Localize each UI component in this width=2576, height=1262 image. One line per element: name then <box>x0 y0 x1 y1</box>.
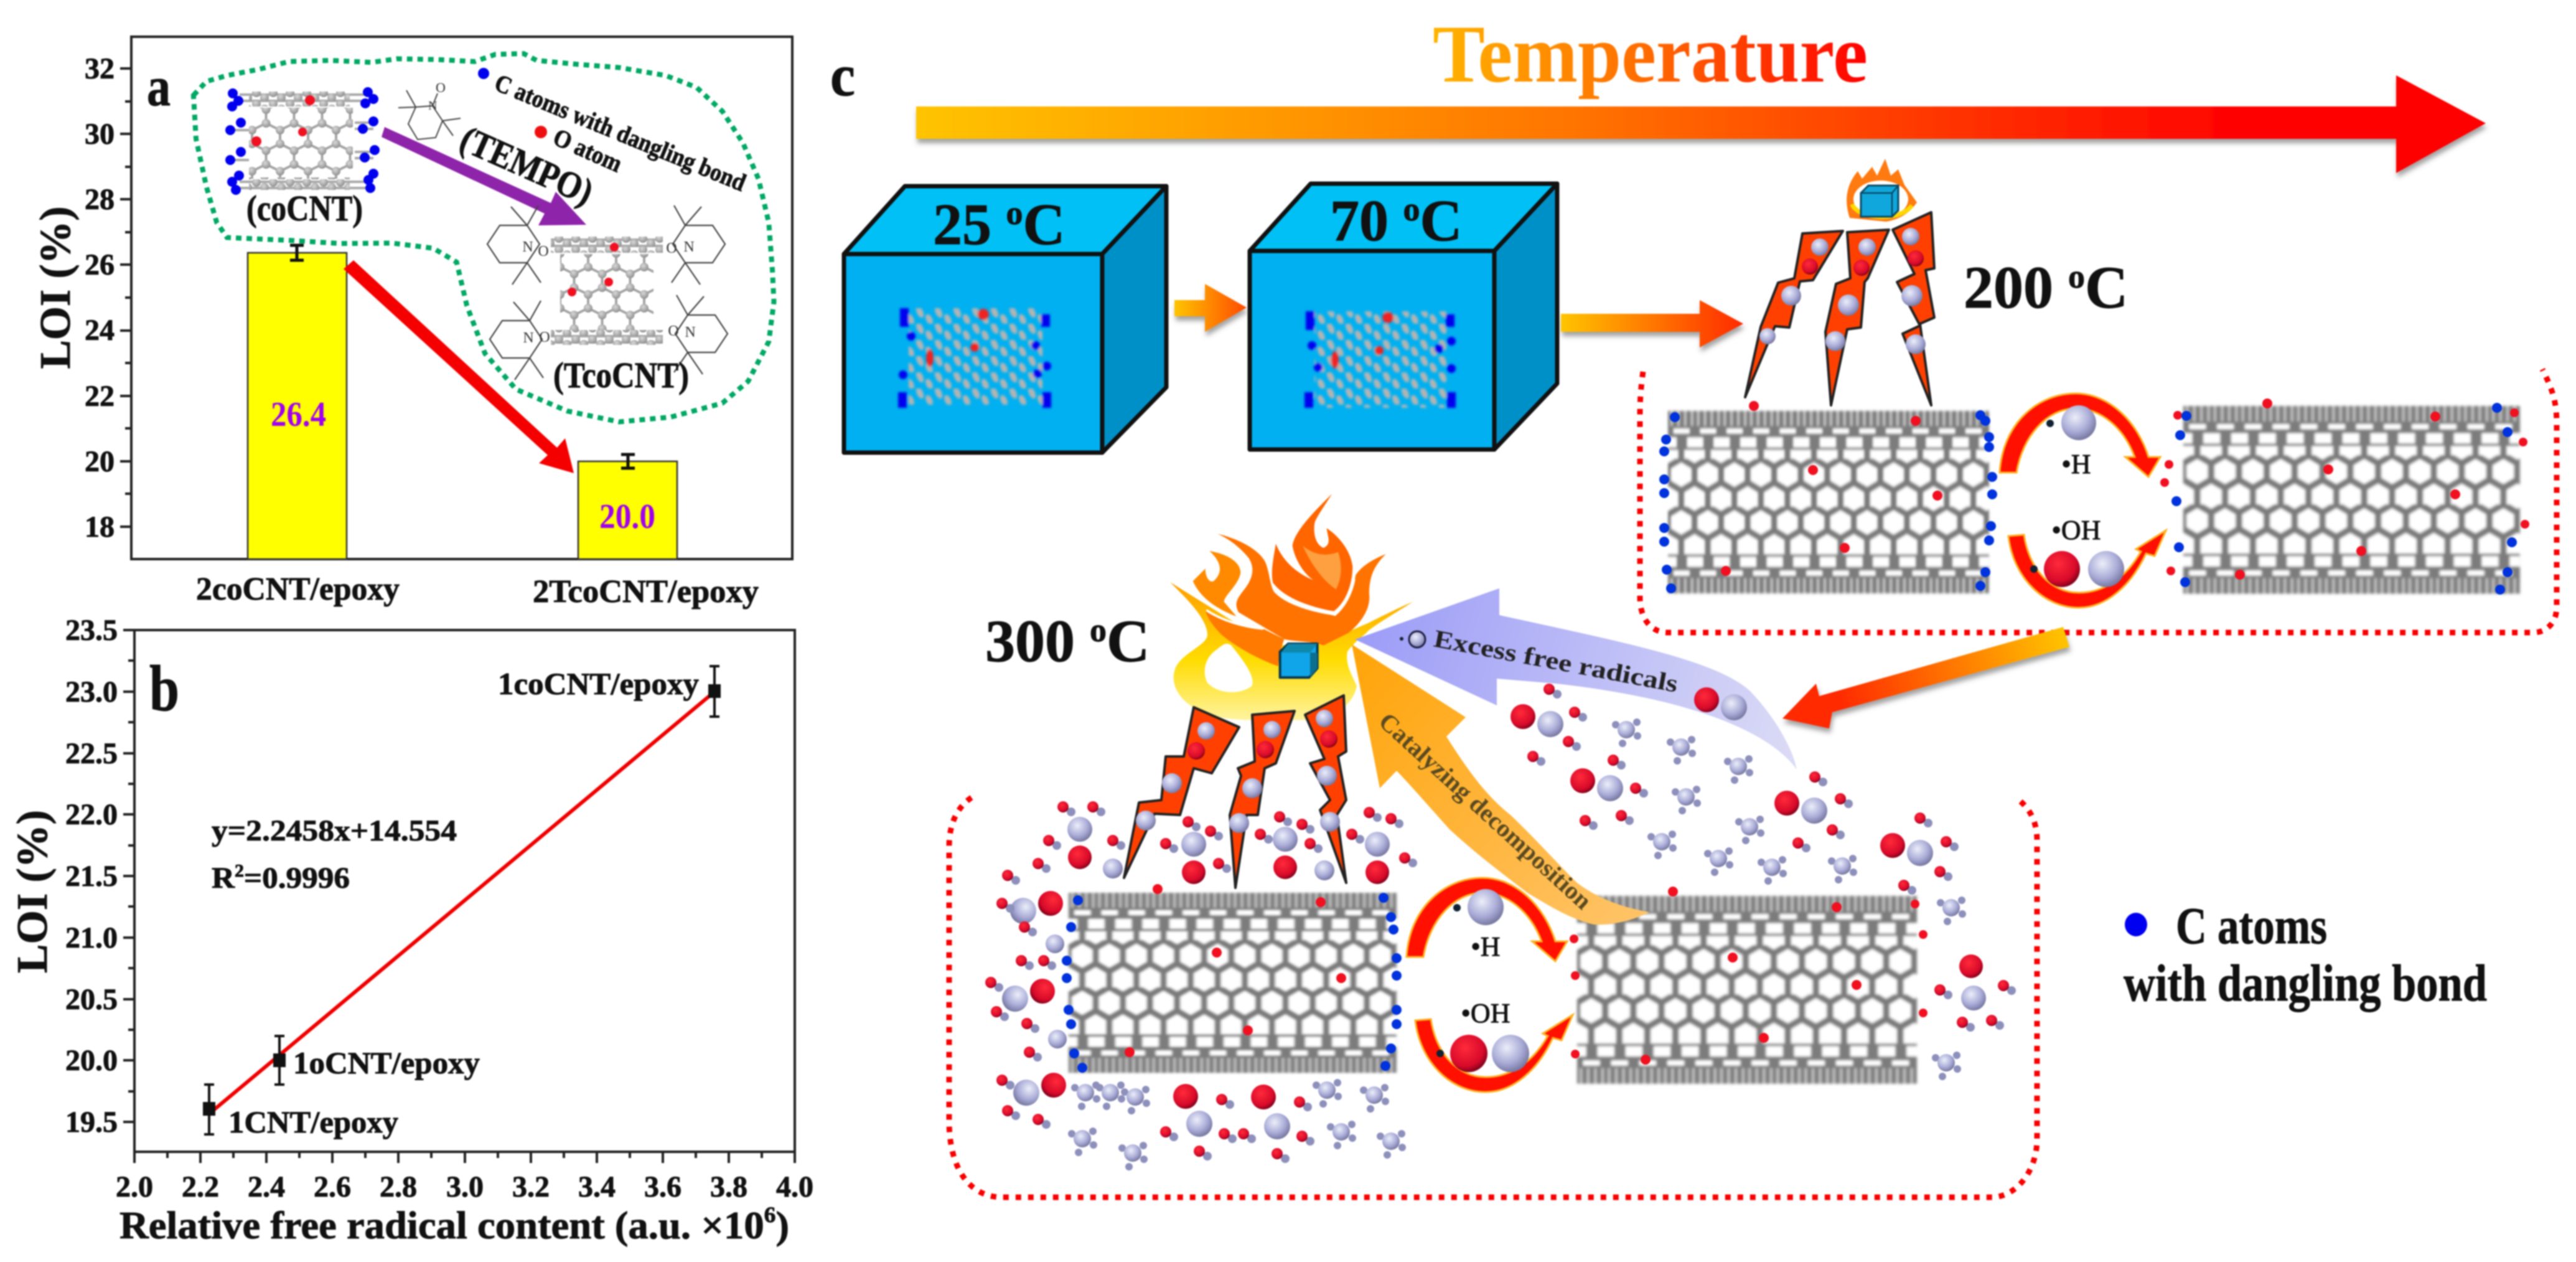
x tick labels: 3.8 <box>710 1170 747 1203</box>
radicals 300C <box>1436 889 1529 1072</box>
lightning bolts 200C <box>1745 212 1934 405</box>
y tick labels: 20.0 <box>65 1044 118 1077</box>
legend text C atoms: C atoms <box>2176 897 2327 955</box>
free TEMPO structure: O <box>436 80 446 95</box>
y tick labels: 20.5 <box>65 983 118 1016</box>
label 200 C: 200 <box>1964 254 2053 321</box>
y axis tick labels: 32 <box>85 52 115 85</box>
CNT in cube 25C <box>899 308 1051 408</box>
y axis tick labels: 18 <box>85 511 115 544</box>
point labels: 1coCNT/epoxy <box>498 666 699 701</box>
panel c: temperature mechanism <box>830 8 2557 1197</box>
x tick labels: 2.2 <box>182 1170 219 1203</box>
TcoCNT molecule: O <box>666 240 677 257</box>
x labels: 2coCNT/epoxy <box>196 572 400 607</box>
radicals on bolts 300C <box>1136 710 1340 833</box>
y axis tick labels: 24 <box>85 314 115 347</box>
radicals cloud upper middle <box>1510 684 1959 895</box>
legend text with dangling bond: with dangling bond <box>2124 954 2487 1012</box>
equation: y=2.2458x+14.554 <box>212 814 457 847</box>
label 300 C: C <box>1107 608 1150 674</box>
label 25 C: C <box>1023 192 1065 257</box>
coCNT label: (coCNT) <box>246 188 363 228</box>
x axis title: 6 <box>764 1202 775 1227</box>
legend text C atoms: C atoms with dangling bond <box>491 68 750 197</box>
panel b: LOI vs free radicals <box>9 614 813 1247</box>
error bars <box>290 245 635 468</box>
text catalyzing decomposition: Catalyzing decomposition <box>1374 707 1598 915</box>
y axis tick labels <box>85 52 115 544</box>
cube 70C <box>1250 184 1557 450</box>
x labels <box>196 572 759 610</box>
radicals right of right tube <box>1932 897 2016 1080</box>
label 200 C: C <box>2085 254 2128 321</box>
y axis tick labels: 28 <box>85 183 115 216</box>
x tick labels: 3.0 <box>446 1170 484 1203</box>
x tick labels: 2.8 <box>380 1170 417 1203</box>
bar value 20.0: 20.0 <box>599 497 655 536</box>
big temperature arrow <box>916 75 2486 173</box>
dotted box 300C <box>949 798 2037 1197</box>
radicals cloud top of left tube <box>1043 801 1417 884</box>
TcoCNT molecule: O <box>538 243 549 260</box>
CNT left 300C <box>1062 884 1402 1073</box>
y axis title: LOI (%) <box>32 207 80 369</box>
panel letter a: a <box>147 56 171 118</box>
radicals 300C: •H <box>1471 931 1501 962</box>
x tick labels: 4.0 <box>776 1170 813 1203</box>
TcoCNT molecule: N <box>523 330 534 346</box>
legend blue atom <box>478 68 489 79</box>
CNT right 300C <box>1570 887 1927 1084</box>
legend dot C atoms <box>2125 913 2147 936</box>
bar value 26.4: 26.4 <box>271 395 326 434</box>
y tick labels: 22.5 <box>65 737 118 770</box>
TcoCNT molecule: N <box>685 324 696 341</box>
TcoCNT molecule: N <box>683 239 695 255</box>
text excess free radicals: Excess free radicals <box>1431 624 1680 698</box>
x labels: 2TcoCNT/epoxy <box>533 574 759 610</box>
Temperature title: Temperature <box>1433 8 1868 100</box>
lilac arrow <box>1355 588 1797 770</box>
CNT left 200C <box>1659 401 1997 593</box>
exchange arrows 200C <box>2000 393 2166 608</box>
label 200 C: o <box>2068 258 2085 295</box>
panel letter b: b <box>149 652 179 725</box>
x axis title: ) <box>775 1205 789 1247</box>
dotted box 200C <box>1640 369 2557 633</box>
point labels: 1CNT/epoxy <box>228 1104 398 1139</box>
R squared: 2 <box>235 862 244 881</box>
CNT in cube 70C <box>1308 311 1456 408</box>
x tick labels <box>116 1170 813 1203</box>
y axis tick labels: 30 <box>85 118 115 151</box>
x tick labels: 2.4 <box>248 1170 285 1203</box>
TcoCNT label: (TcoCNT) <box>553 355 689 395</box>
legend red atom <box>535 126 547 138</box>
arrow 200C to 300C <box>1782 627 2069 728</box>
y tick labels <box>65 614 118 1139</box>
free TEMPO structure: N <box>428 99 437 113</box>
arrow between cubes <box>1174 284 1247 332</box>
label 300 C: o <box>1090 611 1107 649</box>
label 70 C: C <box>1420 189 1462 253</box>
TcoCNT molecule: O <box>668 323 679 339</box>
radicals 200C: •OH <box>2052 515 2101 545</box>
TcoCNT molecule: O <box>539 329 550 346</box>
legend text O atom: O atom <box>549 123 627 177</box>
purple arrow <box>382 127 586 225</box>
data points with error bars <box>204 666 719 1134</box>
y axis tick labels: 26 <box>85 248 115 281</box>
y axis title: LOI (%) <box>9 810 57 973</box>
radicals on bolts 200C <box>1759 228 1926 354</box>
label 25 C: o <box>1006 194 1023 232</box>
point labels: 1oCNT/epoxy <box>293 1045 480 1080</box>
chart frame <box>131 37 792 559</box>
y axis tick labels: 20 <box>85 445 115 478</box>
TcoCNT molecule: N <box>522 239 533 255</box>
x axis title: Relative free radical content (a.u. ×10 <box>119 1205 738 1247</box>
y tick labels: 21.5 <box>65 860 118 893</box>
x tick labels: 2.0 <box>116 1170 153 1203</box>
label 25 C: 25 <box>933 192 991 257</box>
frame <box>134 630 795 1152</box>
x tick labels: 3.4 <box>578 1170 616 1203</box>
CNT right 200C <box>2160 398 2529 595</box>
red arrow <box>344 260 574 473</box>
coCNT molecule <box>225 87 380 195</box>
R squared: R <box>212 862 233 895</box>
y axis tick labels: 22 <box>85 380 115 413</box>
ticks <box>123 630 795 1163</box>
R squared: =0.9996 <box>244 862 350 895</box>
radicals cloud below left tube <box>1068 1079 1406 1170</box>
x tick labels: 3.6 <box>644 1170 681 1203</box>
x tick labels: 2.6 <box>314 1170 351 1203</box>
point labels <box>228 666 699 1139</box>
radicals 200C <box>2030 405 2124 587</box>
fit line <box>209 692 714 1114</box>
bar 2TcoCNT/epoxy <box>578 461 677 559</box>
arrow cube to 200C <box>1561 300 1743 347</box>
label 70 C: o <box>1403 191 1420 228</box>
radical on lilac arrow <box>1400 631 1425 647</box>
exchange arrows 300C <box>1407 878 1573 1092</box>
free TEMPO structure <box>398 80 461 139</box>
y tick labels: 22.0 <box>65 798 118 831</box>
y tick labels: 23.5 <box>65 614 118 647</box>
radicals 300C: •OH <box>1461 998 1510 1029</box>
cube 25C <box>844 186 1166 453</box>
lightning bolts 300C <box>1124 695 1346 888</box>
panel a: LOI bar chart <box>32 37 792 610</box>
panel letter c: c <box>830 42 855 108</box>
bar 2coCNT/epoxy <box>248 253 347 559</box>
TEMPO label: (TEMPO) <box>454 118 599 213</box>
large flame with cube <box>1170 494 1413 720</box>
radicals 200C: •H <box>2061 449 2091 479</box>
TcoCNT molecule <box>487 205 728 380</box>
y tick labels: 23.0 <box>65 676 118 709</box>
radicals cloud left of left tube <box>985 858 1067 1129</box>
label 70 C: 70 <box>1330 189 1389 253</box>
orange arrow <box>1352 644 1649 925</box>
x tick labels: 3.2 <box>512 1170 550 1203</box>
label 300 C: 300 <box>985 608 1075 674</box>
y axis ticks <box>120 68 131 527</box>
green dotted outline <box>194 54 774 422</box>
small flame with cube <box>1847 159 1917 222</box>
y tick labels: 21.0 <box>65 921 118 954</box>
y tick labels: 19.5 <box>65 1106 118 1139</box>
